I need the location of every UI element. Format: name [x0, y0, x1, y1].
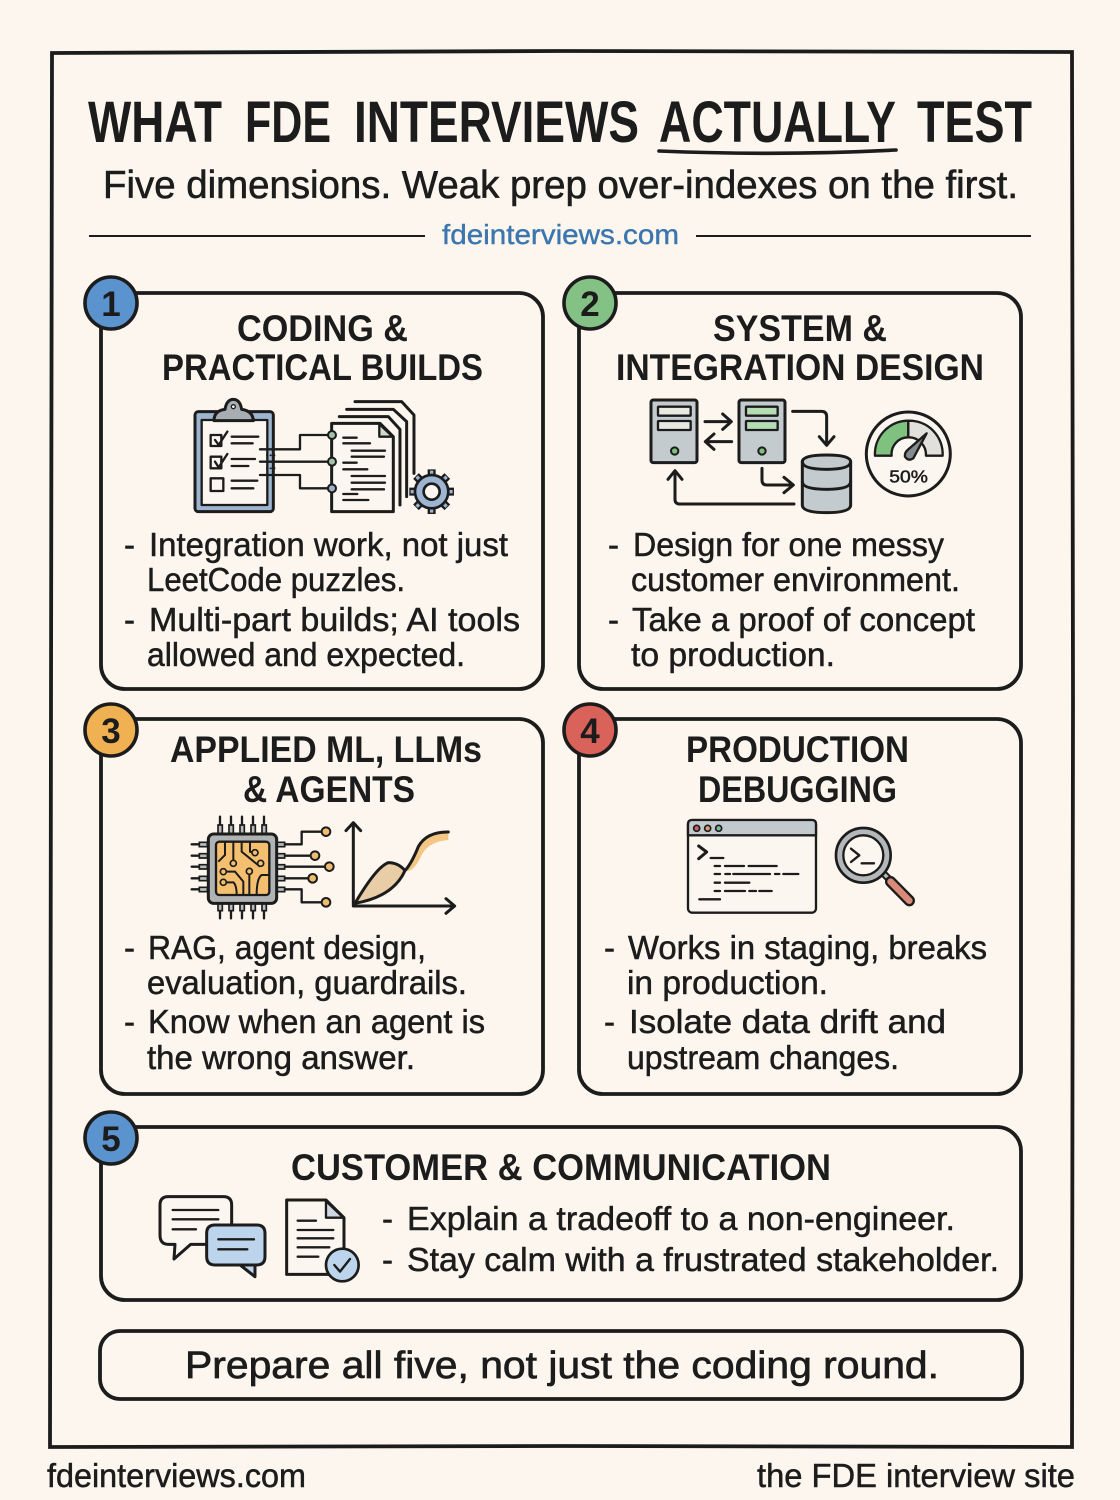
bullet list: LeetCode puzzles. — [147, 561, 405, 598]
bullet list: - — [124, 929, 135, 966]
heading — [616, 308, 984, 388]
callout: Prepare all five, not just the coding round. — [185, 1345, 939, 1387]
site link with rules: fdeinterviews.com — [442, 219, 679, 250]
badge 2 — [564, 277, 616, 329]
footer right: the FDE interview site — [757, 1457, 1075, 1494]
bullet list: Integration work, not just — [149, 526, 508, 563]
bullet list: customer environment. — [631, 561, 960, 598]
heading: PRACTICAL BUILDS — [162, 347, 483, 388]
icon: servers, database and 50 percent gauge: 50% — [889, 467, 928, 487]
title: ACTUALLY — [659, 90, 896, 155]
bullet list: Multi-part builds; AI tools — [149, 601, 520, 638]
title: WHAT — [88, 90, 222, 155]
heading: CUSTOMER & COMMUNICATION — [291, 1147, 831, 1188]
title — [88, 90, 1032, 155]
panel: system and integration design — [564, 277, 1021, 689]
bullet list: Stay calm with a frustrated stakeholder. — [407, 1241, 999, 1278]
heading: PRODUCTION — [686, 729, 909, 770]
heading: INTEGRATION DESIGN — [616, 347, 984, 388]
bullet list: upstream changes. — [627, 1039, 899, 1076]
bullet list: to production. — [631, 636, 835, 673]
bullet list — [382, 1200, 999, 1278]
heading: CODING & — [237, 308, 408, 349]
badge 4: 4 — [580, 712, 600, 751]
bullet list: - — [604, 1003, 615, 1040]
bullet list: Works in staging, breaks — [628, 929, 987, 966]
badge 3 — [85, 704, 137, 756]
icon: servers, database and 50 percent gauge — [651, 400, 950, 513]
bullet list: - — [124, 1003, 135, 1040]
bullet list: in production. — [627, 964, 828, 1001]
heading — [686, 729, 909, 810]
bullet list: Know when an agent is — [148, 1003, 485, 1040]
badge 2: 2 — [580, 285, 600, 324]
icon: terminal window and magnifier — [688, 820, 909, 913]
title: FDE — [245, 90, 331, 155]
title: INTERVIEWS — [354, 90, 639, 155]
bullet list — [124, 929, 485, 1076]
bullet list — [604, 929, 987, 1076]
bullet list: - — [382, 1241, 393, 1278]
icon: chip and curve chart — [192, 817, 455, 918]
bullet list: - — [124, 601, 135, 638]
badge 4 — [564, 704, 616, 756]
bullet list: allowed and expected. — [147, 636, 465, 673]
icon: speech bubbles and checked document — [160, 1197, 359, 1281]
badge 1: 1 — [101, 285, 121, 324]
bullet list: - — [608, 526, 619, 563]
bullet list: the wrong answer. — [147, 1039, 415, 1076]
bullet list — [608, 526, 975, 673]
panel: customer and communication — [85, 1112, 1021, 1300]
title: TEST — [917, 90, 1032, 155]
subtitle: Five dimensions. Weak prep over-indexes on the first. — [103, 164, 1018, 207]
bullet list: - — [382, 1200, 393, 1237]
footer left: fdeinterviews.com — [47, 1457, 306, 1494]
bullet list: - — [124, 526, 135, 563]
heading: SYSTEM & — [713, 308, 887, 349]
panel: coding and practical builds — [85, 277, 543, 689]
bullet list: Design for one messy — [633, 526, 944, 563]
badge 1 — [85, 277, 137, 329]
callout — [100, 1331, 1022, 1399]
bullet list: - — [608, 601, 619, 638]
bullet list — [124, 526, 520, 673]
panel: applied ML, LLMs and agents — [85, 704, 543, 1094]
heading — [170, 729, 482, 810]
heading: APPLIED ML, LLMs — [170, 729, 482, 770]
badge 5 — [85, 1112, 137, 1164]
icon: clipboard linked to documents and gear — [195, 399, 454, 514]
bullet list: Take a proof of concept — [632, 601, 975, 638]
bullet list: Explain a tradeoff to a non-engineer. — [407, 1200, 955, 1237]
bullet list: evaluation, guardrails. — [147, 964, 467, 1001]
badge 3: 3 — [101, 712, 121, 751]
heading: DEBUGGING — [698, 769, 897, 810]
bullet list: Isolate data drift and — [629, 1003, 946, 1040]
bullet list: - — [604, 929, 615, 966]
badge 5: 5 — [101, 1120, 121, 1159]
heading: & AGENTS — [243, 769, 415, 810]
bullet list: RAG, agent design, — [148, 929, 426, 966]
panel: production debugging — [564, 704, 1021, 1094]
heading — [162, 308, 483, 388]
